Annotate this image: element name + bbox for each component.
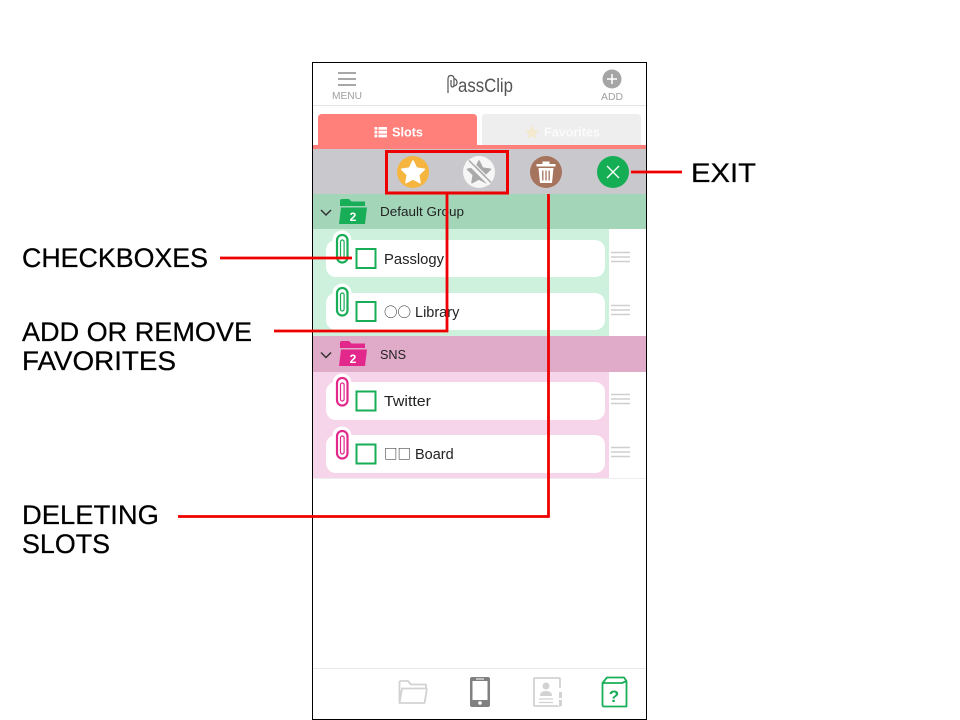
slot row: Board (326, 426, 630, 473)
arrow line: deleting (178, 194, 548, 516)
arrow line: checkboxes (220, 257, 352, 259)
label: ADD OR REMOVE FAVORITES: FAVORITES (22, 346, 176, 376)
slot row: Twitter: Twitter (384, 394, 431, 410)
label: DELETING SLOTS (22, 500, 159, 559)
slot row: Passlogy (326, 230, 630, 277)
arrow line: favorites (274, 194, 447, 331)
label: ADD OR REMOVE FAVORITES (22, 317, 252, 376)
phone screen frame (312, 62, 646, 720)
action toolbar (313, 149, 646, 194)
tab: Slots (318, 114, 477, 145)
slot row: Twitter (326, 374, 630, 420)
icon: trash (530, 156, 562, 188)
group: SNS (313, 336, 646, 478)
slot row: Board: Board (415, 447, 454, 463)
red box: favorite buttons (386, 152, 508, 193)
icon: menu (332, 72, 362, 102)
icon: add to favorites (397, 156, 429, 188)
icon: folder tab (400, 681, 427, 703)
label: CHECKBOXES: CHECKBOXES (22, 243, 208, 273)
chevron (321, 352, 331, 358)
arrow line: exit (631, 171, 682, 173)
slot row: OO Library: ○○ (384, 301, 411, 321)
icon: green folder (339, 199, 367, 224)
group: Default Group: Default Group (380, 205, 464, 219)
slot row: Board: □□ (384, 443, 411, 463)
app logo: PassClip: assClip (458, 76, 513, 97)
tab: Slots: Slots (392, 124, 423, 140)
icon: help book tab: ? (609, 687, 619, 706)
label: ADD OR REMOVE FAVORITES: ADD OR REMOVE (22, 317, 252, 347)
tab: Favorites (482, 114, 641, 145)
label: EXIT: EXIT (691, 158, 756, 188)
icon: menu: MENU (332, 91, 362, 102)
icon: exit (597, 156, 629, 188)
icon: green folder: 2 (350, 210, 357, 224)
icon: add button (601, 70, 623, 103)
bottom navigation bar (313, 668, 646, 707)
group: SNS: SNS (380, 348, 406, 362)
chevron (321, 210, 331, 215)
tab: Favorites: Favorites (544, 124, 600, 140)
icon: pink folder: 2 (350, 352, 357, 366)
slot row: Passlogy: Passlogy (384, 252, 445, 268)
label: DELETING SLOTS: DELETING (22, 500, 159, 530)
tab underline bar (313, 145, 646, 149)
icon: phone tab (470, 677, 490, 707)
slot row: OO Library: Library (415, 305, 460, 321)
label: DELETING SLOTS: SLOTS (22, 529, 110, 559)
icon: remove from favorites (463, 156, 495, 188)
slot row: OO Library (326, 284, 630, 330)
group: Default Group (313, 194, 646, 336)
icon: pink folder (339, 341, 367, 366)
icon: add button: ADD (601, 92, 623, 103)
icon: contact card tab (534, 678, 562, 706)
icon: help book tab (602, 678, 626, 706)
